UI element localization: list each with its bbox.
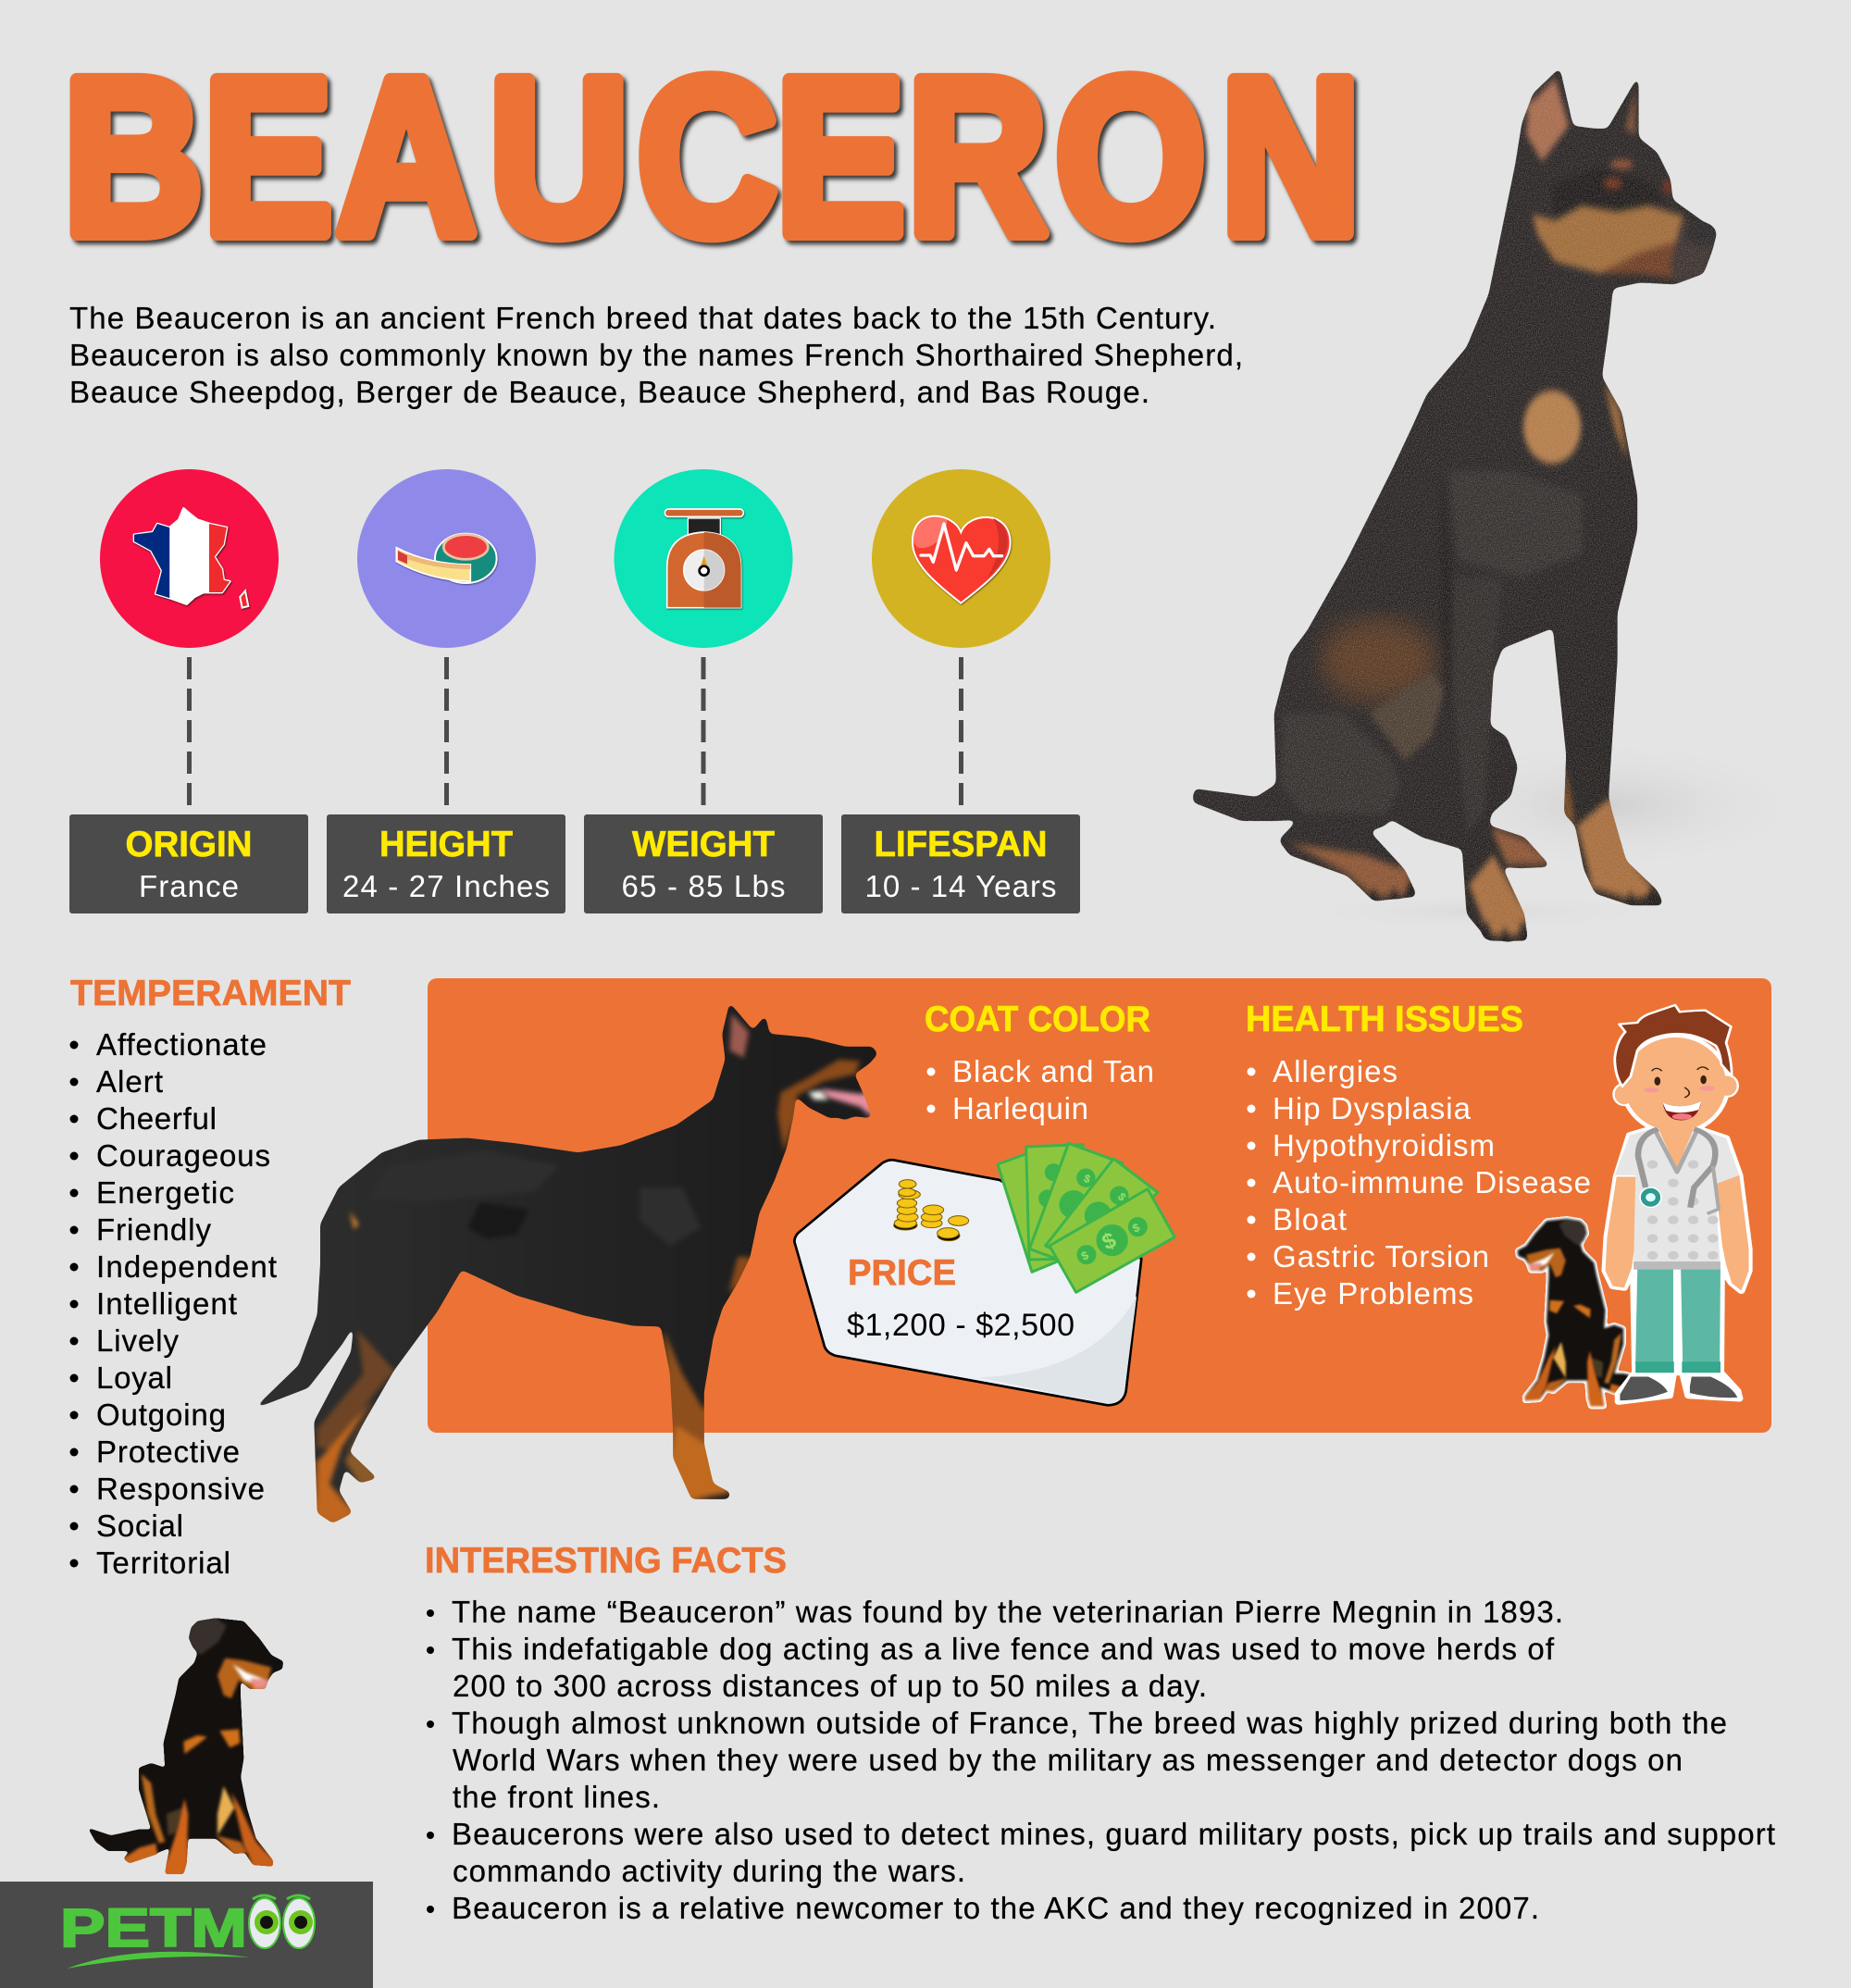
stat card: origin: France: [139, 869, 239, 903]
temperament list: [70, 1027, 277, 1580]
logo: PETMOO: PETM: [60, 1898, 247, 1958]
dashed connector: height: [444, 657, 449, 805]
stat card: height: 24 - 27 Inches: [342, 869, 550, 903]
health issues list: Gastric Torsion: [1273, 1239, 1489, 1274]
health issues list: Bloat: [1273, 1202, 1347, 1236]
logo: PETMOO: [60, 1895, 315, 1969]
price label: [847, 1253, 1075, 1343]
intro text: The Beauceron is an ancient French breed that dates back to the 15th Century.: [69, 301, 1216, 335]
icon circle: lifespan: [872, 469, 1050, 648]
temperament list: Territorial: [96, 1546, 230, 1580]
facts list: Though almost unknown outside of France, The breed was highly prized during both the: [452, 1706, 1727, 1740]
icon: measuring tape: [396, 534, 497, 583]
icon: heart with pulse: [913, 516, 1011, 603]
heading: health issues: HEALTH ISSUES: [1246, 1000, 1523, 1039]
intro text: Beauceron is also commonly known by the names French Shorthaired Shepherd,: [69, 338, 1243, 372]
temperament list: Intelligent: [96, 1286, 237, 1321]
coat color list: Harlequin: [952, 1091, 1088, 1125]
stat card: lifespan: [841, 814, 1080, 913]
health issues list: Allergies: [1273, 1054, 1398, 1088]
vet trousers: [1619, 1269, 1739, 1402]
facts list: World Wars when they were used by the military as messenger and detector dogs on: [453, 1743, 1683, 1777]
intro text: Beauce Sheepdog, Berger de Beauce, Beauce Shepherd, and Bas Rouge.: [69, 375, 1149, 409]
vet outline: [1606, 1037, 1749, 1402]
facts list: The name “Beauceron” was found by the veterinarian Pierre Megnin in 1893.: [452, 1595, 1563, 1629]
stat card: height: HEIGHT: [379, 825, 513, 864]
intro text: [69, 301, 1243, 409]
illustration: sitting dog bottom left: [88, 1618, 283, 1874]
health issues list: [1248, 1054, 1591, 1311]
coat color list: Black and Tan: [952, 1054, 1154, 1088]
vet arms: [1606, 1175, 1749, 1291]
panel: orange info panel: [428, 978, 1771, 1433]
health issues list: Hip Dysplasia: [1273, 1091, 1472, 1125]
facts list: This indefatigable dog acting as a live fence and was used to move herds of: [452, 1632, 1555, 1666]
footer logo band: [0, 1882, 373, 1988]
facts list: [427, 1595, 1775, 1925]
price card: $: [1115, 1190, 1129, 1204]
illustration: dog beside doctor: [1518, 1219, 1660, 1407]
stat card: weight: WEIGHT: [632, 825, 775, 864]
icon circle: weight: [615, 469, 792, 648]
illustration: main sitting dog: [1192, 68, 1814, 942]
vet stethoscope: [1638, 1129, 1719, 1213]
health issues list: Eye Problems: [1273, 1276, 1473, 1311]
price card: [794, 1143, 1174, 1405]
dashed connector: origin: [187, 657, 192, 805]
temperament list: Lively: [96, 1323, 180, 1358]
stat card: lifespan: 10 - 14 Years: [864, 869, 1057, 903]
icon: kitchen scale: [665, 509, 743, 608]
icon: France map: [130, 503, 248, 608]
vet shirt: [1615, 1127, 1739, 1270]
icon: coins: [894, 1180, 969, 1241]
facts list: Beauceron is a relative newcomer to the AKC and they recognized in 2007.: [452, 1891, 1539, 1925]
temperament list: Cheerful: [96, 1101, 217, 1136]
price card: $: [1130, 1221, 1142, 1236]
illustration: standing dog: [255, 1003, 877, 1523]
stat card: origin: [69, 814, 308, 913]
heading: temperament: TEMPERAMENT: [70, 974, 351, 1013]
facts list: 200 to 300 across distances of up to 50 miles a day.: [453, 1669, 1207, 1703]
icon circle: origin: [100, 469, 279, 648]
facts list: the front lines.: [453, 1780, 660, 1814]
price card: $: [1082, 1172, 1093, 1186]
stat card: weight: [584, 814, 823, 913]
temperament list: Affectionate: [96, 1027, 267, 1062]
temperament list: Courageous: [96, 1138, 270, 1173]
temperament list: Outgoing: [96, 1398, 226, 1432]
dashed connector: lifespan: [959, 657, 963, 805]
price card: $: [1079, 1249, 1090, 1263]
health issues list: Auto-immune Disease: [1273, 1165, 1591, 1199]
facts list: Beaucerons were also used to detect mines, guard military posts, pick up trails and support: [452, 1817, 1775, 1851]
temperament list: Social: [96, 1509, 183, 1543]
health issues list: Hypothyroidism: [1273, 1128, 1495, 1162]
title: BEAUCERON: [64, 31, 1360, 280]
stat card: height: [327, 814, 565, 913]
heading: interesting facts: INTERESTING FACTS: [425, 1541, 787, 1581]
dashed connector: weight: [702, 657, 705, 805]
facts list: commando activity during the wars.: [453, 1854, 965, 1888]
temperament list: Energetic: [96, 1175, 234, 1210]
icon circle: height: [357, 469, 536, 648]
stat card: lifespan: LIFESPAN: [874, 825, 1048, 864]
temperament list: Alert: [96, 1064, 163, 1099]
vet head: [1613, 1005, 1738, 1131]
price label: PRICE: [848, 1253, 956, 1293]
temperament list: Independent: [96, 1249, 277, 1284]
coat color list: [927, 1054, 1154, 1125]
temperament list: Protective: [96, 1435, 240, 1469]
icon: dollar bills: [998, 1143, 1174, 1292]
temperament list: Responsive: [96, 1472, 265, 1506]
stat card: origin: ORIGIN: [126, 825, 252, 864]
stat card: weight: 65 - 85 Lbs: [622, 869, 785, 903]
temperament list: Loyal: [96, 1361, 172, 1395]
temperament list: Friendly: [96, 1212, 211, 1247]
price label: $1,200 - $2,500: [847, 1308, 1075, 1343]
price card: $: [1099, 1227, 1120, 1256]
illustration: cartoon vet: [1606, 1005, 1749, 1402]
heading: coat color: COAT COLOR: [925, 1000, 1150, 1039]
